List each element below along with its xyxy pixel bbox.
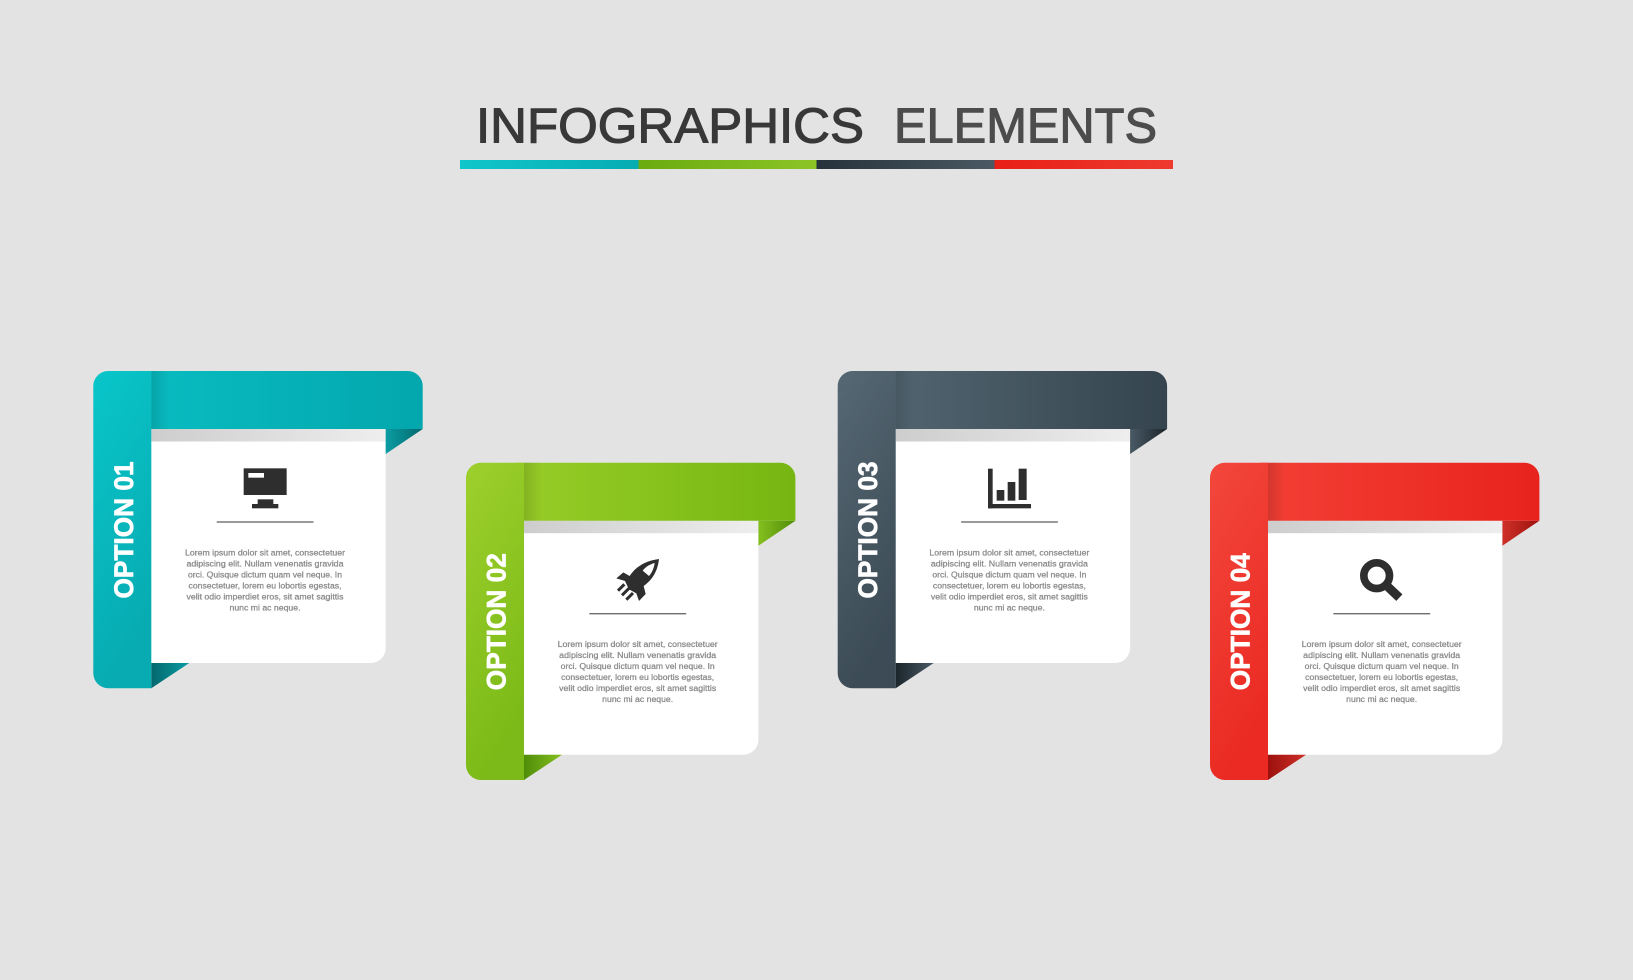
top band [516,463,795,521]
divider [1333,613,1430,614]
option label: OPTION 02 [482,553,512,690]
title colour bar [460,160,1173,169]
body text: orci. Quisque dictum quam vel neque. In [932,570,1087,580]
body text: nunc mi ac neque. [602,694,673,704]
option label: OPTION 03 [853,462,883,598]
body text [1302,639,1462,704]
body text: Lorem ipsum dolor sit amet, consectetuer [558,639,718,649]
body text: consectetuer, lorem eu lobortis egestas, [188,580,341,590]
body text: nunc mi ac neque. [1346,694,1417,704]
vertical strip [838,371,896,688]
body text: Lorem ipsum dolor sit amet, consectetuer [1302,639,1462,649]
panel: option 04 [1210,463,1539,780]
body text: orci. Quisque dictum quam vel neque. In [1305,661,1459,671]
body text: nunc mi ac neque. [974,602,1045,612]
top band [1260,463,1539,521]
title [476,98,1157,154]
icon: monitor [244,468,287,508]
divider [217,521,314,523]
body text: Lorem ipsum dolor sit amet, consectetuer [929,548,1090,558]
top band [888,371,1167,429]
body text: consectetuer, lorem eu lobortis egestas, [1305,672,1458,682]
body text: consectetuer, lorem eu lobortis egestas, [933,580,1086,590]
white card [896,429,1130,663]
body text: velit odio imperdiet eros, sit amet sagittis [1303,683,1460,693]
body text: adipiscing elit. Nullam venenatis gravida [931,558,1088,568]
top band [143,371,423,429]
divider [961,521,1058,523]
panel: option 01 [93,371,423,688]
body text: adipiscing elit. Nullam venenatis gravida [186,558,344,568]
folds [1268,521,1539,780]
folds [151,429,423,688]
vertical strip [1210,463,1268,780]
body text: velit odio imperdiet eros, sit amet sagittis [559,683,716,693]
option label: OPTION 04 [1226,553,1256,690]
option label: OPTION 01 [109,462,139,598]
body text: adipiscing elit. Nullam venenatis gravida [1303,650,1460,660]
divider [589,613,686,614]
vertical strip [466,463,524,780]
white card [1268,521,1502,755]
icon: magnifier [1364,563,1399,598]
body text: consectetuer, lorem eu lobortis egestas, [561,672,714,682]
vertical strip [93,371,151,688]
panel: option 03 [838,371,1167,688]
icon: bar chart [988,469,1031,508]
body text [929,548,1090,612]
body text: orci. Quisque dictum quam vel neque. In [188,570,342,580]
folds [524,521,795,780]
icon: rocket [616,559,659,601]
body text [185,548,345,612]
white card [151,429,386,663]
body text: velit odio imperdiet eros, sit amet sagittis [931,592,1088,602]
body text: velit odio imperdiet eros, sit amet sagittis [186,592,343,602]
panel: option 02 [466,463,795,780]
body text: orci. Quisque dictum quam vel neque. In [561,661,715,671]
title: INFOGRAPHICS [476,98,864,154]
body text: Lorem ipsum dolor sit amet, consectetuer [185,548,345,558]
title: ELEMENTS [894,98,1157,154]
body text [558,639,718,704]
white card [524,521,758,755]
folds [896,429,1167,688]
body text: nunc mi ac neque. [230,602,300,612]
body text: adipiscing elit. Nullam venenatis gravida [559,650,716,660]
